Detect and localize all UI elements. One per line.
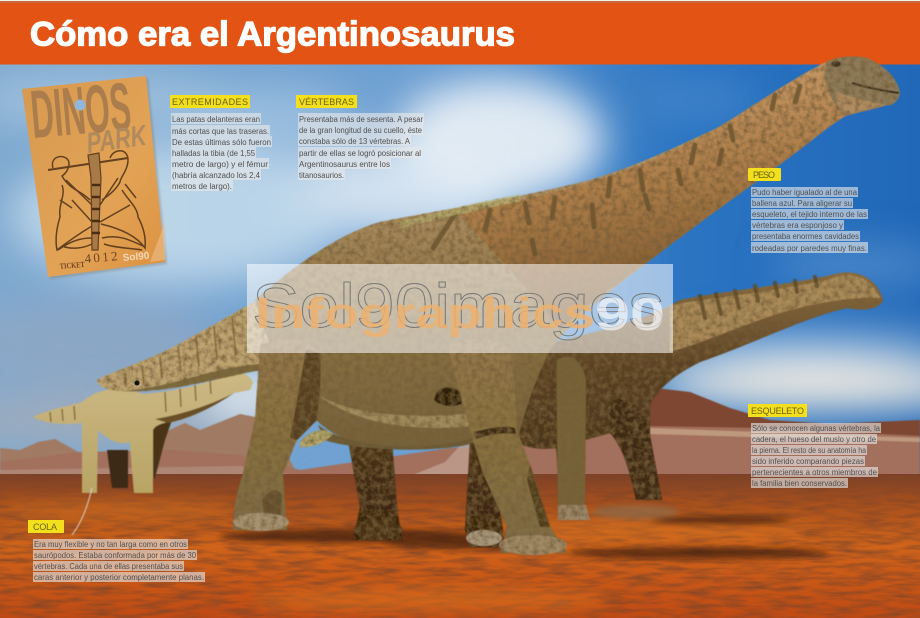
feet dust <box>233 513 289 531</box>
text block: vertebras <box>296 95 424 180</box>
text block: peso: presentaba enormes cavidades <box>752 232 859 241</box>
text block: peso <box>748 168 868 253</box>
dinosaur: small far left <box>33 373 253 535</box>
label: peso: PESO <box>753 170 775 180</box>
background: red desert ground <box>0 474 920 618</box>
belly <box>318 395 478 428</box>
dinosaur: main Argentinosaurus <box>97 57 900 555</box>
text block: cola <box>28 520 205 582</box>
tail <box>97 298 320 391</box>
tail stripes <box>125 316 236 387</box>
text block: esqueleto: pertenecientes a otros miembros de <box>752 468 878 477</box>
text block: peso: esqueleto, el tejido interno de las <box>752 210 867 219</box>
label: esqueleto: ESQUELETO <box>751 406 804 416</box>
neck stripes <box>433 86 800 254</box>
dust near rear foot <box>591 505 679 519</box>
watermark: 90 <box>595 288 665 340</box>
text block: extremidades: Las patas delanteras eran <box>172 115 260 124</box>
title banner <box>0 0 920 64</box>
text block: vertebras: constaba sólo de 13 vértebras. A <box>299 137 411 146</box>
background: sky <box>0 60 920 480</box>
text block: vertebras: Presentaba más de sesenta. A pesar <box>299 115 423 124</box>
text block: cola: Era muy flexible y no tan larga como en otros <box>34 540 187 549</box>
text block: vertebras: titanosaurios. <box>299 171 344 180</box>
text block: esqueleto: la familia bien conservados. <box>752 479 847 488</box>
title: Cómo era el Argentinosaurus <box>30 16 515 54</box>
icon: Dinos Park ticket <box>22 69 167 279</box>
text block: esqueleto: sido inferido comparando piezas <box>752 457 864 466</box>
text block: extremidades: De estas últimas sólo fueron <box>172 138 271 147</box>
text block: cola: saurópodos. Estaba conformada por más de 30 <box>34 551 197 560</box>
text block: peso: vértebras era esponjoso y <box>752 221 843 230</box>
watermark: Infographics <box>255 289 595 338</box>
text block: extremidades: metros de largo). <box>172 182 232 191</box>
rear leg <box>233 340 321 530</box>
text block: extremidades: halladas la tibia (de 1,55 <box>172 149 256 158</box>
text block: vertebras: partir de ellas se logró posicionar al <box>299 149 421 158</box>
background: distant hills <box>0 388 920 490</box>
text block: cola: vértebras. Cada una de ellas presentaba sus <box>34 562 183 571</box>
watermark: Sol90images <box>252 272 664 341</box>
callout marker dot on tail <box>134 380 140 386</box>
text block: extremidades: (habría alcanzado los 2,4 <box>172 171 261 180</box>
text block: vertebras: Argentinosaurus entre los <box>299 160 390 169</box>
icon: skeleton sketch <box>48 151 145 250</box>
text block: extremidades <box>170 95 272 191</box>
text block: peso: rodeadas por paredes muy finas. <box>752 244 867 253</box>
icon: Dinos Park ticket: TICKET <box>59 260 86 271</box>
front leg <box>447 340 567 553</box>
label: cola <box>28 520 64 533</box>
icon: Dinos Park ticket: Sol90 <box>122 251 150 264</box>
text block: peso: ballena azul. Para aligerar su <box>752 199 852 208</box>
text block: extremidades: más cortas que las traseras. <box>172 127 269 136</box>
head details <box>852 83 899 93</box>
dinosaur: second, rear neck and body <box>513 272 883 520</box>
watermark <box>247 264 673 353</box>
text block: cola: caras anterior y posterior completamente planas. <box>34 573 204 582</box>
text block: esqueleto: la pierna. El resto de su anatomía ha <box>752 446 866 455</box>
label: vertebras: VÉRTEBRAS <box>299 97 354 107</box>
icon: Dinos Park ticket: PARK <box>85 120 150 160</box>
icon: Dinos Park ticket: DINOS <box>28 69 134 153</box>
text block: esqueleto: Sólo se conocen algunas vértebras, la <box>752 424 881 433</box>
label: extremidades: EXTREMIDADES <box>172 97 248 107</box>
icon: Dinos Park ticket: 4012 <box>84 248 118 266</box>
label: cola: COLA <box>33 522 57 532</box>
text block: esqueleto <box>748 404 881 488</box>
text block: peso: Pudo haber igualado al de una <box>752 188 858 197</box>
text block: vertebras: de la gran longitud de su cuello, éste <box>299 126 423 135</box>
text block: esqueleto: cadera, el hueso del muslo y otro de <box>752 435 877 444</box>
torso and neck <box>255 57 900 448</box>
shadows under the dinosaurs <box>220 516 830 559</box>
text block: extremidades: metro de largo) y el fémur <box>172 160 268 169</box>
far legs <box>348 440 402 540</box>
